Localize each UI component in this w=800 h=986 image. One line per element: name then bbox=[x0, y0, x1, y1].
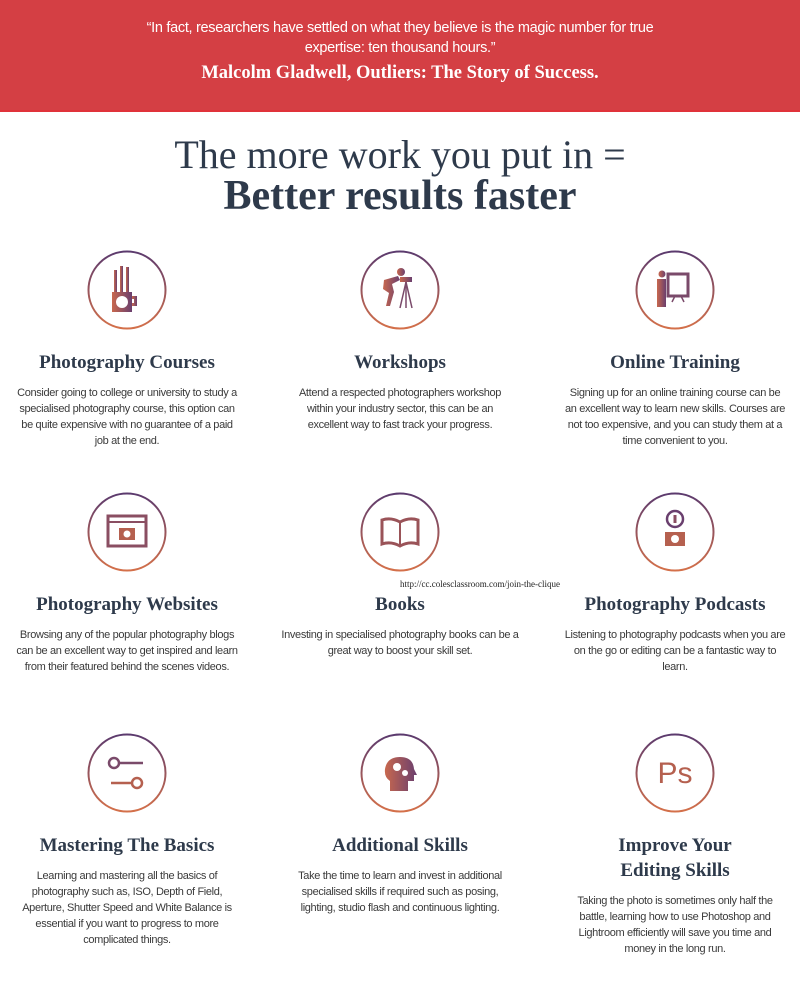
quote text: “In fact, researchers have settled on what they believe is the magic number for true bbox=[147, 20, 653, 36]
quote text bbox=[147, 20, 654, 56]
icon: Ps logo: Ps bbox=[657, 757, 693, 790]
icon: podcast camera bbox=[636, 492, 714, 572]
quote attribution: Malcolm Gladwell, Outliers: The Story of Success. bbox=[201, 63, 599, 83]
panel: books bbox=[281, 492, 519, 657]
icon: open book bbox=[360, 492, 440, 572]
heading: Photography Courses bbox=[39, 352, 215, 373]
banner: quote bbox=[0, 0, 800, 112]
description: Consider going to college or university to study a specialised photography course, this option can be quite expensive with no guarantee of a paid job at the end. bbox=[17, 387, 237, 447]
heading: Improve Your bbox=[618, 835, 732, 856]
heading: Books bbox=[375, 594, 425, 615]
heading: Additional Skills bbox=[332, 835, 468, 856]
description: Attend a respected photographers workshop within your industry sector, this can be an excellent way to fast track your progress. bbox=[299, 387, 501, 431]
title line 1: The more work you put in = bbox=[174, 132, 626, 177]
quote text: expertise: ten thousand hours.” bbox=[305, 40, 495, 56]
panel: photography podcasts bbox=[565, 492, 786, 673]
heading: Editing Skills bbox=[620, 860, 730, 881]
icon: head with gears bbox=[360, 734, 440, 812]
description: Taking the photo is sometimes only half the battle, learning how to use Photoshop and Lightroom efficiently will save you time and money in the long run. bbox=[577, 895, 773, 955]
panel: photography websites bbox=[16, 492, 238, 673]
description: Listening to photography podcasts when you are on the go or editing can be a fantastic way to learn. bbox=[565, 629, 785, 673]
panel: photography courses bbox=[17, 250, 238, 447]
panel: improve editing skills bbox=[577, 734, 773, 955]
icon: presenter with board bbox=[636, 250, 714, 330]
heading: Photography Websites bbox=[36, 594, 218, 615]
panel: workshops bbox=[299, 250, 501, 431]
panel: additional skills bbox=[298, 734, 502, 914]
title line 2: Better results faster bbox=[224, 173, 576, 219]
heading: Online Training bbox=[610, 352, 740, 373]
description: Investing in specialised photography books can be a great way to boost your skill set. bbox=[281, 629, 519, 657]
heading: Workshops bbox=[354, 352, 446, 373]
heading bbox=[618, 835, 732, 881]
heading: Mastering The Basics bbox=[40, 835, 214, 856]
icon: photographer with tripod bbox=[360, 250, 440, 330]
icon: mug with pencils bbox=[88, 250, 166, 330]
panel: mastering the basics bbox=[22, 734, 232, 946]
description: Browsing any of the popular photography blogs can be an excellent way to get inspired and learn from their featured behind the scenes videos. bbox=[16, 629, 238, 673]
description: Learning and mastering all the basics of photography such as, ISO, Depth of Field, Aperture, Shutter Speed and White Balance is essential if you want to progress to more complicated things. bbox=[22, 870, 232, 946]
panel: online training bbox=[565, 250, 785, 447]
icon: browser with camera bbox=[88, 492, 166, 572]
heading: Photography Podcasts bbox=[584, 594, 766, 615]
url note: http://cc.colesclassroom.com/join-the-clique bbox=[400, 579, 560, 589]
description: Signing up for an online training course can be an excellent way to learn new skills. Courses are not too expensive, and you can study them at a time convenient to you. bbox=[565, 387, 785, 447]
icon: sliders bbox=[88, 734, 166, 812]
description: Take the time to learn and invest in additional specialised skills if required such as posing, lighting, studio flash and continuous lighting. bbox=[298, 870, 502, 914]
icon: Ps logo bbox=[636, 734, 714, 812]
